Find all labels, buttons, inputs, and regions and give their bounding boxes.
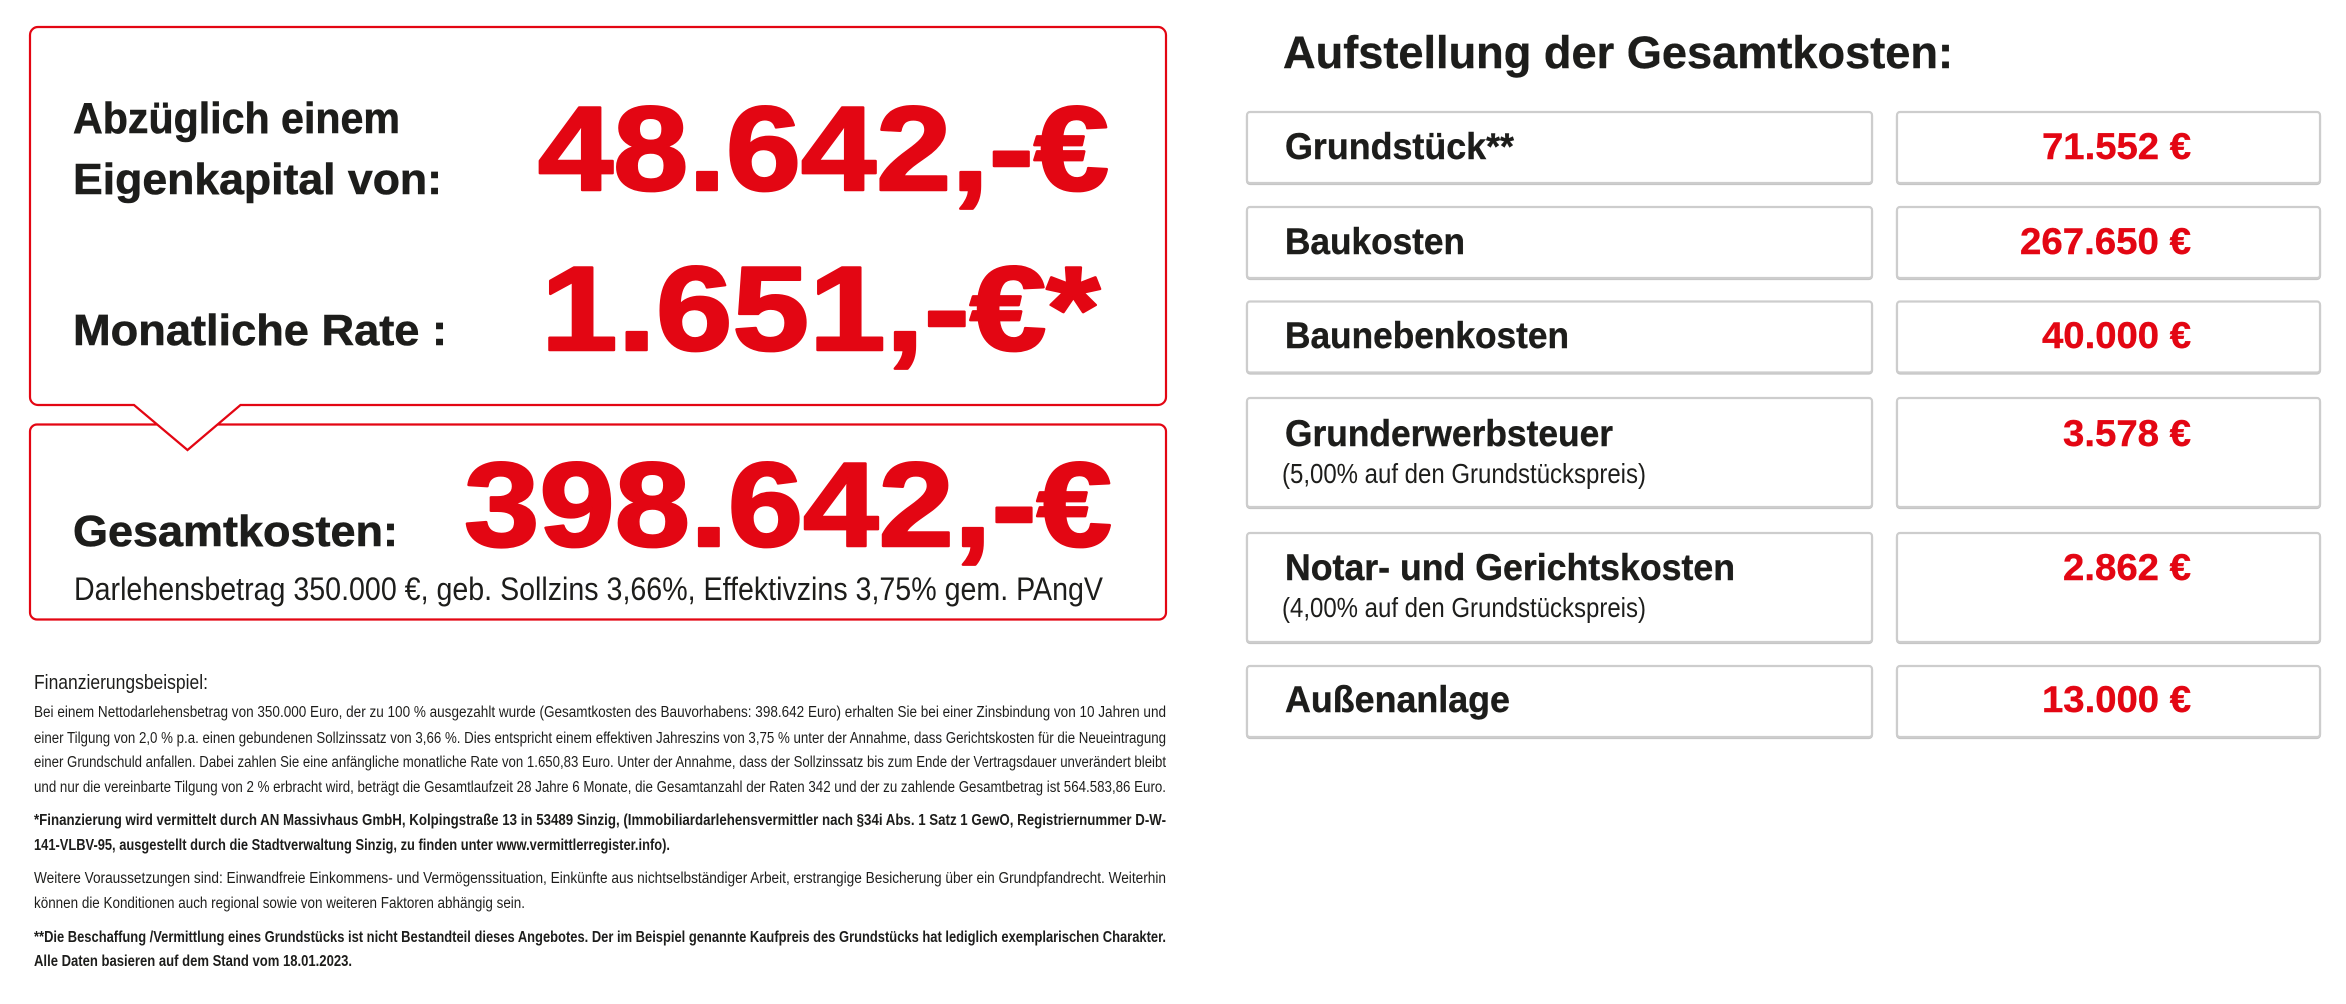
row: Notar- und Gerichtskosten: 2.862 €	[2063, 547, 2191, 588]
panel: equity and monthly rate speech bubble	[30, 27, 1166, 450]
row: Baunebenkosten: 40.000 €	[2042, 315, 2191, 356]
fine print: requirements: Weitere Voraussetzungen sind: Einwandfreie Einkommens- und Vermögenssituation, Einkünfte aus nichtselbständiger Arbeit, erstrangige Besicherung über ein Grundpfandrecht. Weiterhin	[34, 870, 1166, 887]
label: monthly rate: Monatliche Rate :	[73, 306, 447, 355]
row: Außenanlage	[1247, 666, 2320, 737]
fine print paragraph: einer Tilgung von 2,0 % p.a. einen gebundenen Sollzinssatz von 3,66 %. Dies entspricht einem effektiven Jahreszins von 3,75 % unter der Annahme, dass Gerichtskosten für die Neueintragung	[34, 730, 1166, 747]
row: Grunderwerbsteuer: (5,00% auf den Grundstückspreis)	[1282, 458, 1646, 489]
fine print paragraph	[34, 704, 1167, 796]
row: Notar- und Gerichtskosten: (4,00% auf den Grundstückspreis)	[1282, 592, 1646, 623]
row: Grunderwerbsteuer: 3.578 €	[2063, 413, 2191, 454]
label: Gesamtkosten: Gesamtkosten:	[73, 507, 398, 556]
row: Baunebenkosten: Baunebenkosten	[1285, 315, 1569, 356]
value: equity: 48.642,-€	[538, 82, 1109, 216]
row: Baukosten	[1247, 207, 2320, 278]
row: Grundstück: 71.552 €	[2042, 126, 2191, 167]
value: monthly rate: 1.651,-€*	[541, 242, 1100, 376]
fine print: plot note	[34, 929, 1166, 970]
row: Notar- und Gerichtskosten	[1247, 533, 2320, 642]
fine print: broker note	[34, 812, 1166, 854]
fine print: requirements: können die Konditionen auch regional sowie von weiteren Faktoren abhängig sein.	[34, 895, 525, 912]
label: equity: Abzüglich einem	[73, 94, 400, 143]
fine print: broker note: *Finanzierung wird vermittelt durch AN Massivhaus GmbH, Kolpingstraße 13 in 53489 Sinzig, (Immobiliardarlehensvermittler nach §34i Abs. 1 Satz 1 GewO, Registriernummer D-W-	[34, 812, 1166, 829]
row: Grundstück	[1247, 112, 2320, 183]
value: total cost: 398.642,-€	[464, 438, 1112, 572]
fine print: requirements	[34, 870, 1166, 912]
row: Außenanlage: Außenanlage	[1285, 679, 1510, 720]
row: Grundstück: Grundstück**	[1285, 126, 1515, 167]
row: Notar- und Gerichtskosten: Notar- und Gerichtskosten	[1285, 547, 1735, 588]
heading: cost breakdown: Aufstellung der Gesamtkosten:	[1283, 27, 1953, 78]
financing example fine print	[34, 672, 1167, 970]
label: equity second line: Eigenkapital von:	[73, 155, 442, 204]
fine print paragraph: einer Grundschuld anfallen. Dabei zahlen Sie eine anfängliche monatliche Rate von 1.650,83 Euro. Unter der Annahme, dass der Sollzinssatz bis zum Ende der Vertragsdauer unverändert bleibt	[34, 754, 1167, 771]
fine print paragraph: und nur die vereinbarte Tilgung von 2 % erbracht wird, beträgt die Gesamtlaufzeit 28 Jahre 6 Monate, die Gesamtanzahl der Raten 342 und der zu zahlende Gesamtbetrag ist 564.583,86 Euro.	[34, 779, 1166, 796]
fine print paragraph: Bei einem Nettodarlehensbetrag von 350.000 Euro, der zu 100 % ausgezahlt wurde (Gesamtkosten des Bauvorhabens: 398.642 Euro) erhalten Sie bei einer Zinsbindung von 10 Jahren und	[34, 704, 1166, 721]
fine print: broker note: 141-VLBV-95, ausgestellt durch die Stadtverwaltung Sinzig, zu finden unter www.vermittlerregister.info).	[34, 837, 670, 854]
row: Baukosten: 267.650 €	[2020, 221, 2191, 262]
row: Außenanlage: 13.000 €	[2042, 679, 2191, 720]
row: Grunderwerbsteuer	[1247, 398, 2320, 507]
row: Baunebenkosten	[1247, 302, 2320, 372]
fine print heading: Finanzierungsbeispiel:	[34, 672, 208, 694]
fine print: plot note: **Die Beschaffung /Vermittlung eines Grundstücks ist nicht Bestandteil dieses Angebotes. Der im Beispiel genannte Kaufpreis des Grundstücks hat lediglich exemplarischen Charakter.	[34, 929, 1166, 946]
row: Grunderwerbsteuer: Grunderwerbsteuer	[1285, 413, 1613, 454]
panel: total cost box	[30, 424, 1166, 620]
row: Baukosten: Baukosten	[1285, 221, 1465, 262]
fine print: plot note: Alle Daten basieren auf dem Stand vom 18.01.2023.	[34, 953, 352, 970]
loan summary text: Darlehensbetrag 350.000 €, geb. Sollzins 3,66%, Effektivzins 3,75% gem. PAngV	[74, 571, 1104, 607]
